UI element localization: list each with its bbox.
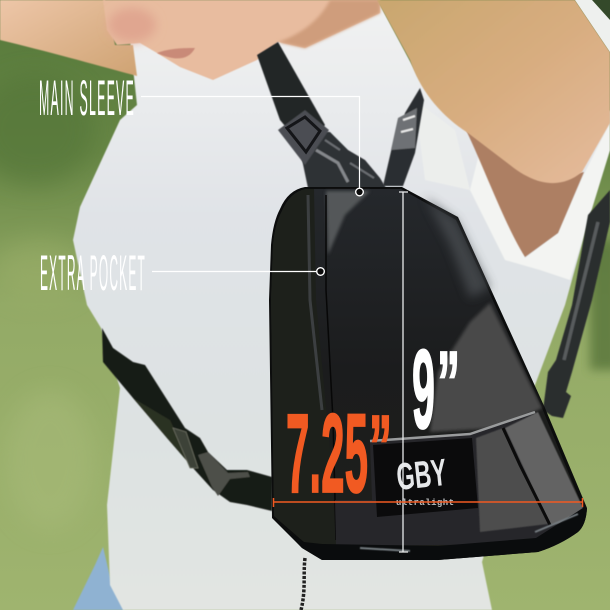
bag body — [269, 187, 587, 560]
callout: main sleeve: MAIN SLEEVE — [39, 70, 135, 126]
width label: 7.25 inches: ” — [369, 398, 392, 498]
bag: side pocket panel — [271, 189, 336, 544]
photo: jeans — [73, 547, 125, 610]
callout: extra pocket — [40, 245, 324, 301]
logo patch: GBY ultralight: GBY — [395, 452, 449, 499]
photo: crumpled fabric above bag — [300, 130, 386, 188]
text: 7.25 — [286, 391, 368, 516]
photo: right arm — [377, 0, 610, 183]
callout: main sleeve — [39, 70, 363, 196]
height label: 9 inches: ” — [437, 334, 460, 434]
bag: glossy bottom binding — [285, 508, 587, 560]
bag: sheen highlights — [326, 191, 370, 255]
photo: armpit shadow — [466, 130, 584, 257]
photo: waist strap and buckles — [102, 328, 272, 511]
callout: extra pocket: EXTRA POCKET — [40, 245, 146, 301]
logo patch: GBY ultralight — [373, 438, 478, 517]
height label: 9 inches: 9 — [412, 327, 435, 452]
photo: top-right strap and buckle — [383, 88, 424, 186]
width dimension line — [273, 498, 583, 507]
logo patch: GBY ultralight: ultralight — [396, 498, 454, 508]
width label: 7.25 inches — [286, 391, 392, 516]
photo: top-left strap and buckle — [257, 42, 329, 165]
drawstring — [301, 558, 305, 610]
bag: lower pocket — [335, 412, 583, 546]
photo: right shoulder strap — [543, 190, 610, 418]
photo: left arm — [0, 0, 137, 76]
bag: zipper — [308, 195, 322, 410]
height dimension line — [399, 192, 408, 552]
photo: face and neck — [103, 0, 380, 80]
